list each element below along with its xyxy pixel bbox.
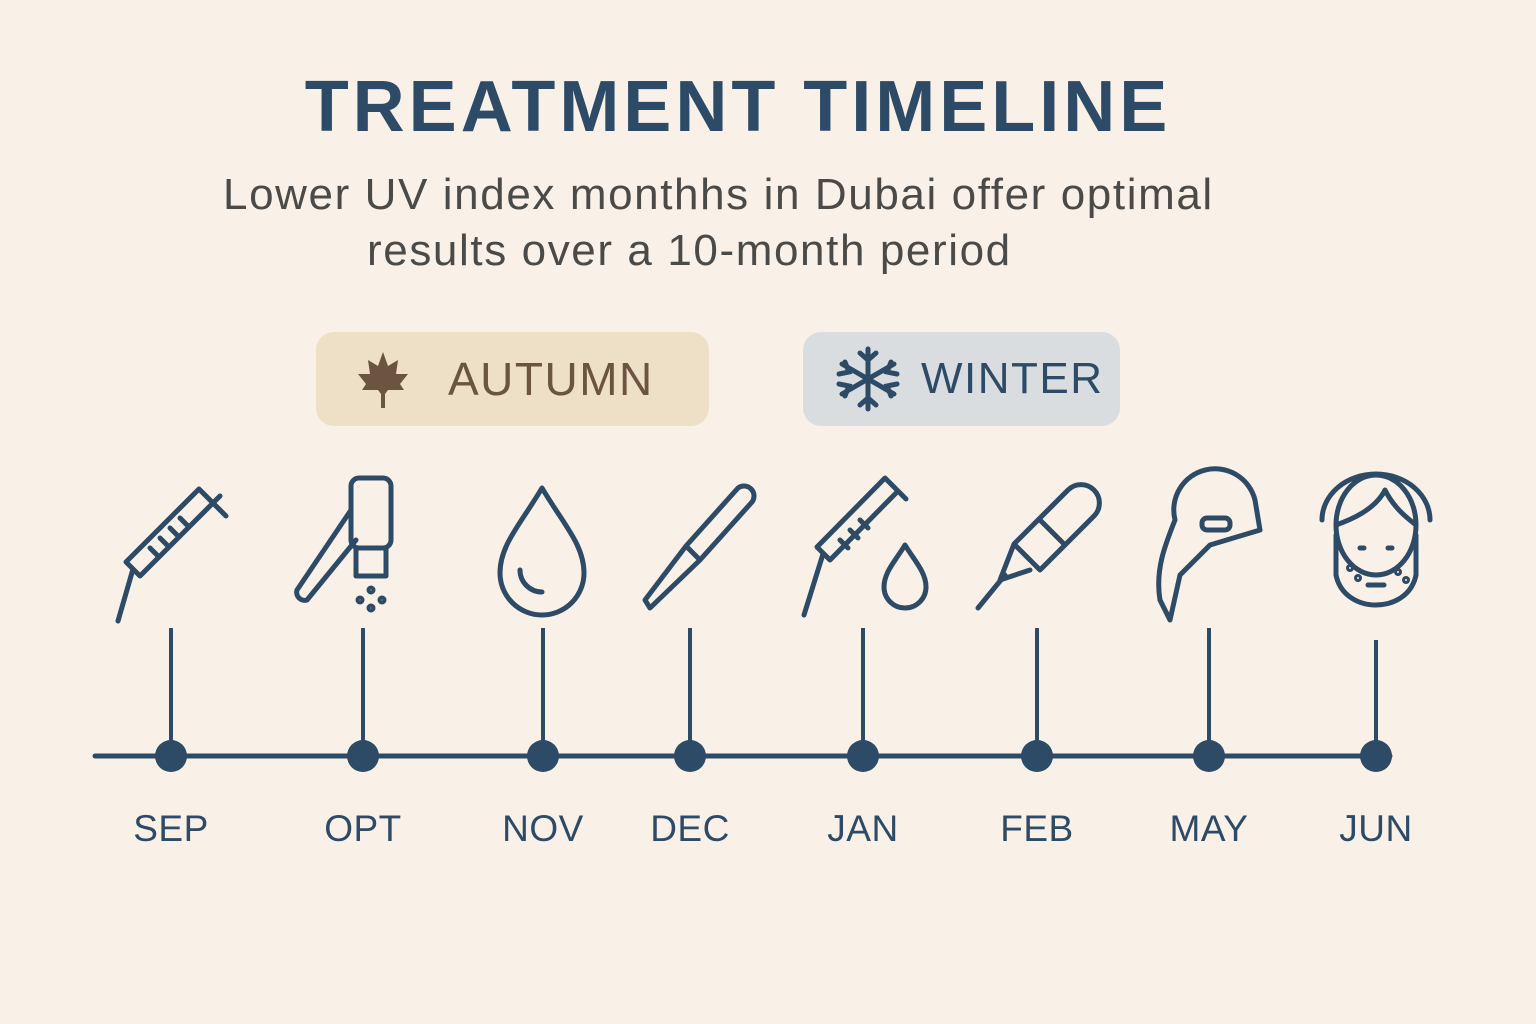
month labels: MAY bbox=[1170, 808, 1248, 849]
winter pill: WINTER bbox=[921, 354, 1104, 403]
subtitle: Lower UV index monthhs in Dubai offer optimal bbox=[223, 170, 1214, 219]
icon: syringe bbox=[118, 489, 226, 621]
icon: drop bbox=[500, 488, 584, 615]
title: TREATMENT TIMELINE bbox=[305, 67, 1171, 147]
icon: dermapen bbox=[297, 478, 391, 610]
month labels: FEB bbox=[1000, 808, 1074, 849]
winter pill bbox=[803, 332, 1120, 426]
month labels: NOV bbox=[502, 808, 584, 849]
month labels: DEC bbox=[650, 808, 730, 849]
icon: scalpel bbox=[645, 486, 754, 608]
subtitle: results over a 10-month period bbox=[367, 226, 1012, 275]
month labels: SEP bbox=[133, 808, 209, 849]
month labels: OPT bbox=[324, 808, 402, 849]
month labels: JUN bbox=[1339, 808, 1413, 849]
icon: pen bbox=[978, 485, 1099, 608]
icon: laser handpiece bbox=[1159, 469, 1260, 620]
subtitle bbox=[223, 170, 1214, 275]
icon: face bbox=[1322, 474, 1430, 605]
autumn pill: AUTUMN bbox=[448, 353, 654, 405]
month labels: JAN bbox=[827, 808, 899, 849]
icon: syringe + drop bbox=[804, 478, 926, 615]
month labels bbox=[133, 808, 1413, 849]
autumn pill bbox=[316, 332, 709, 426]
